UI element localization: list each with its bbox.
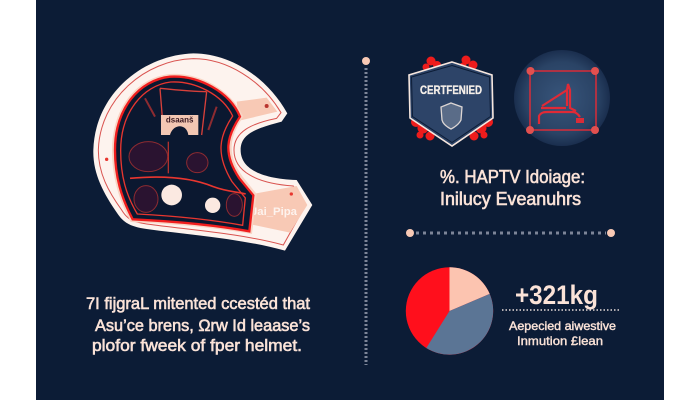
horizontal dotted divider: [406, 229, 615, 237]
stat: +321kg: +321kg: [515, 280, 598, 310]
pie chart: [406, 267, 493, 355]
helmet description text: 7I fijgraL mitented ccestéd that: [86, 294, 310, 313]
icon circle: machine blueprint: [514, 50, 610, 146]
helmet inner label: [161, 115, 198, 135]
stat caption: Aepecied aiwestive: [509, 319, 616, 333]
helmet inner label: dsaanš: [166, 116, 194, 125]
helmet description text: plofor fweek of fper helmet.: [92, 336, 302, 355]
heading: Inilucy Eveanuhrs: [440, 189, 581, 209]
helmet description text: Asu’ce brens, Ωrw Id leaase’s: [95, 316, 310, 335]
helmet description text: [86, 294, 310, 355]
illustration: helmet: Jai_Pipa: [251, 206, 298, 218]
stat caption: [509, 319, 616, 348]
heading: %. HAPTV Idoiage:: [440, 167, 585, 187]
certified badge: [409, 56, 493, 146]
stat dotted rule: [502, 309, 620, 311]
badge red floral accents: [411, 56, 493, 140]
illustration: helmet: [93, 53, 312, 251]
stat caption: Inmution £lean: [517, 334, 603, 348]
badge small shield icon: [441, 103, 462, 129]
vertical dotted divider: [362, 57, 370, 365]
certified badge: CERTFENIED: [420, 85, 482, 97]
heading: [440, 167, 585, 209]
